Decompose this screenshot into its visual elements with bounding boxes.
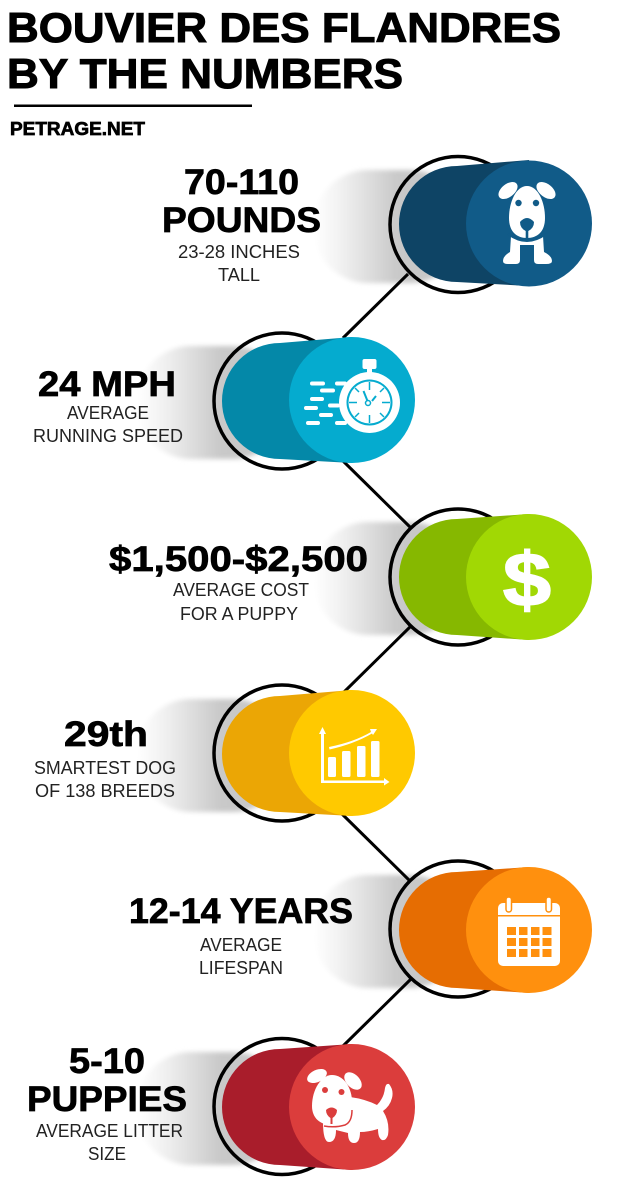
source label: PETRAGE.NET <box>10 118 146 139</box>
title: BY THE NUMBERS <box>7 50 403 97</box>
weight text <box>162 163 321 285</box>
panel: lifespan <box>129 867 592 993</box>
cost text: $1,500-$2,500 <box>109 540 368 579</box>
cost text: AVERAGE COST <box>173 580 309 600</box>
weight text: 70-110 <box>184 163 299 202</box>
speed pill <box>222 337 352 463</box>
lifespan text <box>129 892 353 978</box>
litter pill <box>222 1044 352 1170</box>
icon: dollar sign: $ <box>503 538 551 623</box>
intelligence text: OF 138 BREEDS <box>35 781 175 801</box>
weight pill <box>399 160 529 286</box>
speed text: AVERAGE <box>67 403 149 423</box>
drop shadows <box>137 170 464 1165</box>
icon: puppy side <box>305 1066 393 1143</box>
intelligence pill <box>222 690 352 816</box>
icon: calendar <box>498 897 560 966</box>
intelligence text <box>34 715 176 801</box>
icon: rising bar chart <box>319 727 390 786</box>
panel: cost <box>109 514 592 640</box>
icon: dog front <box>495 179 559 264</box>
litter text: PUPPIES <box>27 1080 187 1119</box>
lifespan text: LIFESPAN <box>199 958 283 978</box>
cost pill <box>399 514 529 640</box>
panel: weight <box>162 160 592 286</box>
title <box>7 4 561 97</box>
weight text: POUNDS <box>162 201 321 240</box>
lifespan pill <box>399 867 529 993</box>
panel: speed <box>33 337 415 463</box>
intelligence text: 29th <box>64 715 148 754</box>
cost text: FOR A PUPPY <box>180 604 298 624</box>
panel: litter <box>27 1042 415 1170</box>
litter text: 5-10 <box>69 1042 145 1081</box>
rings <box>214 156 526 1174</box>
title: BOUVIER DES FLANDRES <box>7 4 561 51</box>
speed text: RUNNING SPEED <box>33 426 183 446</box>
icon: stopwatch <box>306 359 400 433</box>
speed text <box>33 365 183 446</box>
weight text: TALL <box>218 265 260 285</box>
panel: intelligence <box>34 690 415 816</box>
litter text <box>27 1042 187 1164</box>
litter text: AVERAGE LITTER <box>36 1121 183 1141</box>
weight text: 23-28 INCHES <box>178 242 300 262</box>
litter text: SIZE <box>88 1144 126 1164</box>
intelligence text: SMARTEST DOG <box>34 758 176 778</box>
connector lines <box>340 274 411 1046</box>
cost text <box>109 540 368 624</box>
speed text: 24 MPH <box>38 365 176 404</box>
lifespan text: 12-14 YEARS <box>129 892 353 931</box>
lifespan text: AVERAGE <box>200 935 282 955</box>
